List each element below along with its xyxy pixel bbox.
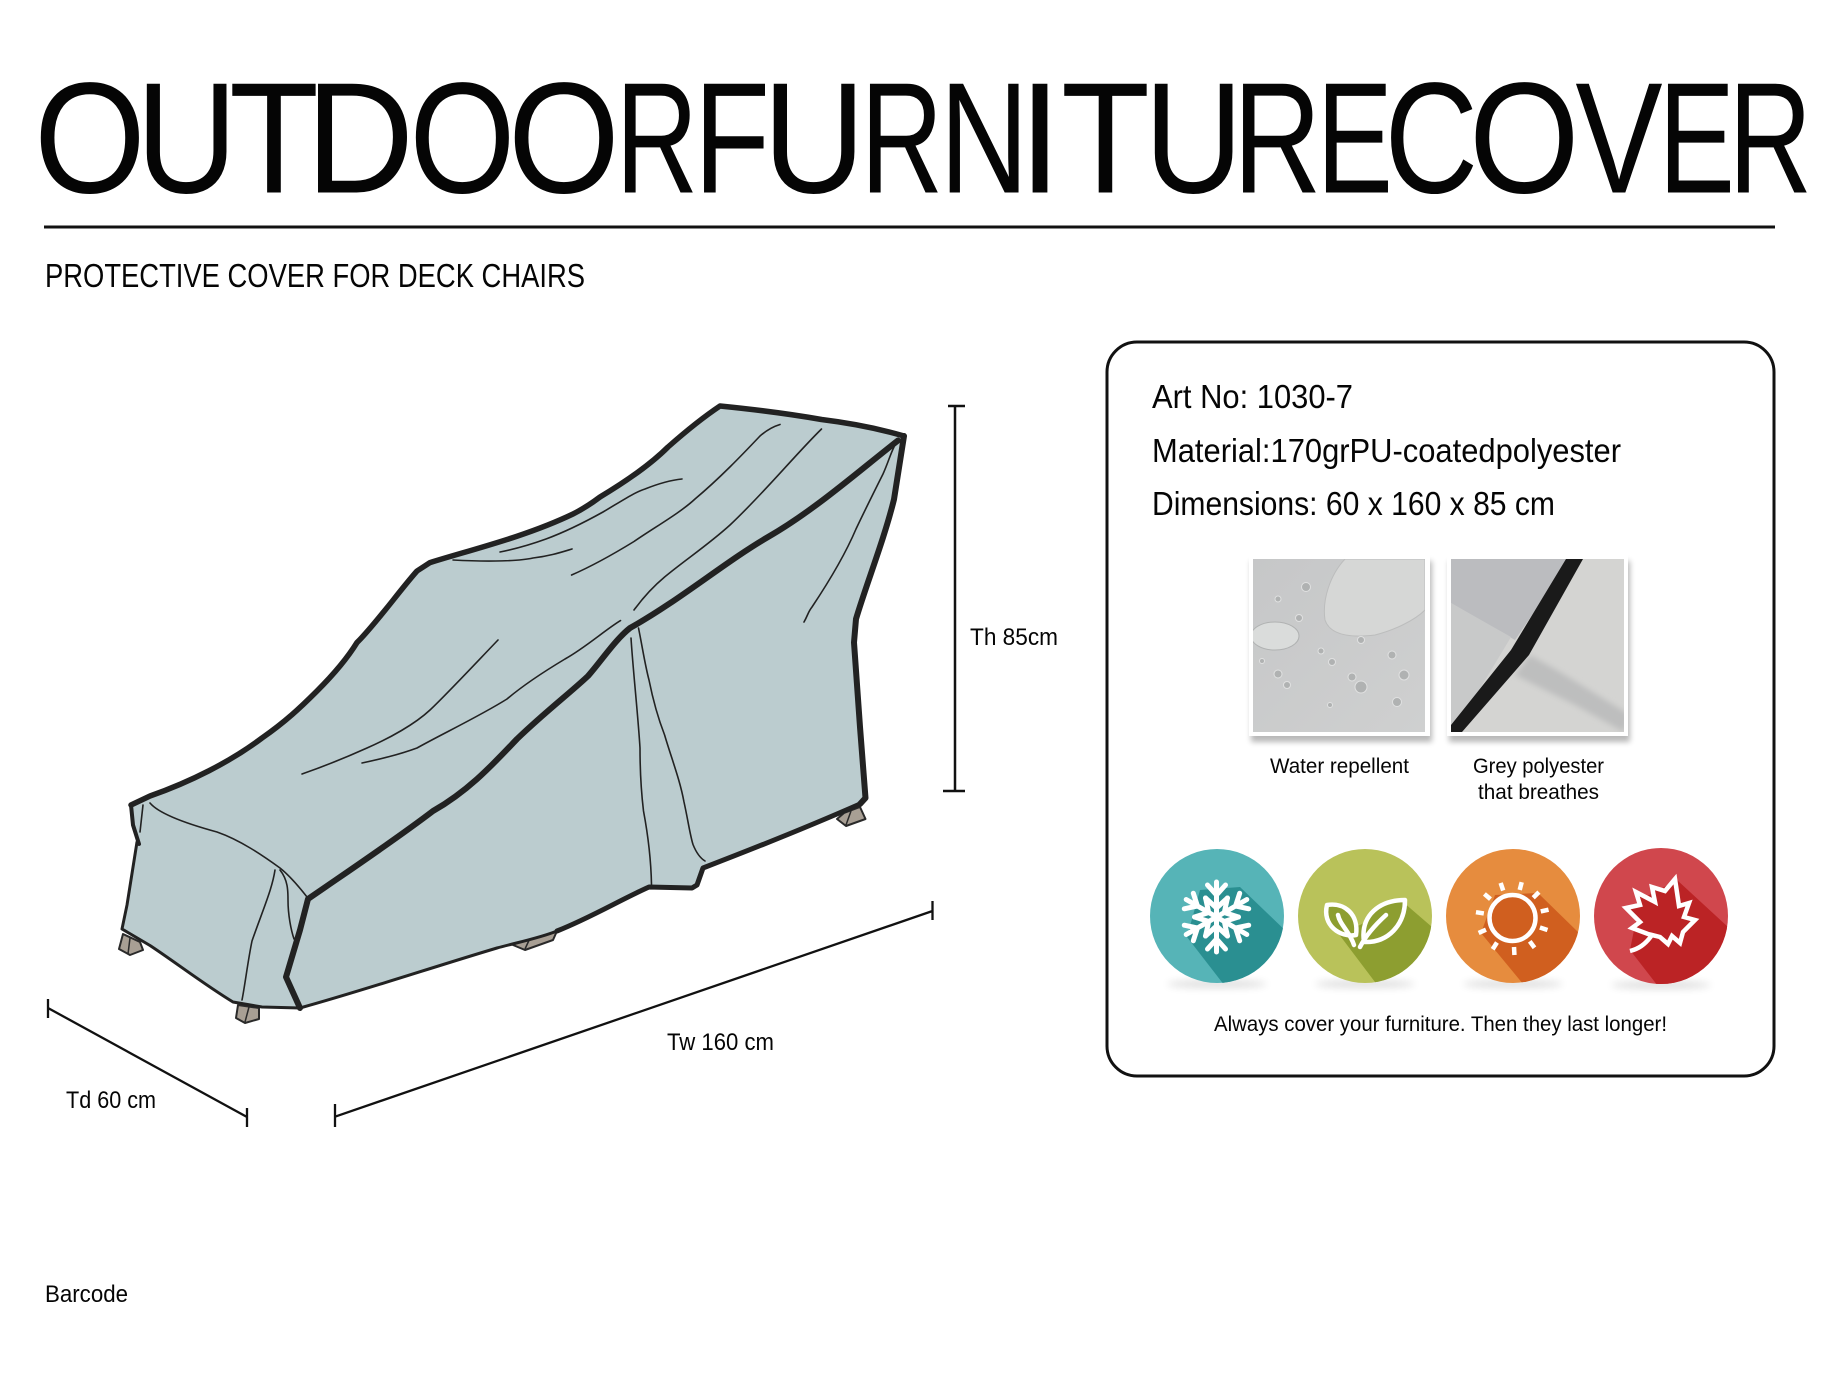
- title: V: [1575, 50, 1663, 226]
- dimension: width: Tw 160 cm: [667, 1029, 774, 1056]
- icon: winter snowflake: [1150, 849, 1284, 990]
- title: T: [229, 50, 319, 226]
- dimension: depth: [48, 999, 247, 1127]
- fabric wrinkles: [140, 424, 894, 1000]
- title: T: [1061, 50, 1150, 226]
- cover outline: [122, 406, 904, 1008]
- title: C: [1384, 50, 1478, 226]
- cover fabric: [122, 406, 904, 1008]
- title: O: [409, 50, 515, 226]
- title: O: [1469, 50, 1580, 226]
- caption: grey polyester: [1473, 755, 1604, 804]
- photo: water repellent fabric: [1249, 555, 1432, 742]
- title: N: [940, 50, 1029, 226]
- title: U: [763, 50, 865, 226]
- title: R: [861, 50, 943, 226]
- title: F: [694, 50, 770, 226]
- material: Material:170grPU-coatedpolyester: [1152, 432, 1621, 469]
- dimensions: Dimensions: 60 x 160 x 85 cm: [1152, 485, 1555, 522]
- caption: grey polyester: Grey polyester: [1473, 755, 1604, 778]
- barcode label: Barcode: [45, 1281, 128, 1308]
- dimension: height: [943, 406, 1058, 791]
- caption: water repellent: Water repellent: [1270, 755, 1409, 778]
- title: R: [1233, 50, 1321, 226]
- tagline: Always cover your furniture. Then they last longer!: [1214, 1013, 1667, 1036]
- title: E: [1659, 50, 1735, 226]
- title: O: [34, 50, 146, 226]
- dimension: depth: Td 60 cm: [66, 1087, 156, 1114]
- title: U: [136, 50, 237, 226]
- title: I: [1018, 50, 1062, 226]
- illustration: covered deck chair: [119, 406, 904, 1023]
- panel: product details: [1107, 342, 1774, 1076]
- icon: summer sun: [1446, 849, 1590, 990]
- dimension: width: [335, 901, 932, 1127]
- title: D: [306, 50, 414, 226]
- caption: grey polyester: that breathes: [1478, 781, 1599, 804]
- title: R: [1728, 50, 1812, 226]
- title: R: [616, 50, 698, 226]
- icon: spring leaves: [1298, 849, 1432, 990]
- photo: grey polyester: [1447, 555, 1630, 742]
- dimension: height: Th 85cm: [970, 624, 1058, 651]
- icon: autumn maple leaf: [1594, 848, 1740, 990]
- art number: Art No: 1030-7: [1152, 378, 1353, 415]
- title: E: [1317, 50, 1393, 226]
- title: U: [1144, 50, 1243, 226]
- subtitle: PROTECTIVE COVER FOR DECK CHAIRS: [45, 257, 585, 294]
- chair legs: [119, 807, 866, 1023]
- title: O: [508, 50, 620, 226]
